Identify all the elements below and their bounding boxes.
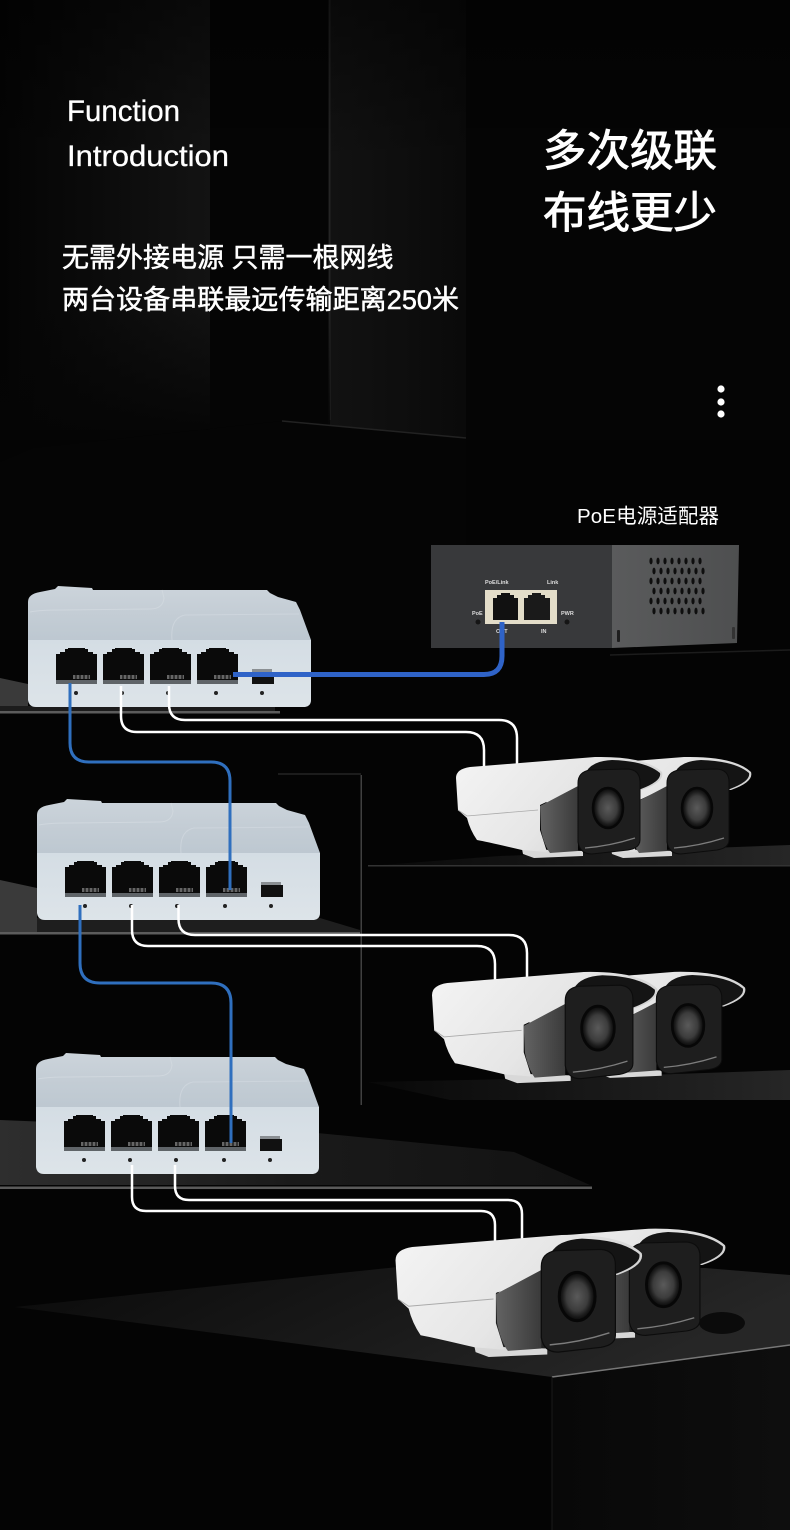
white cables to cameras [121, 686, 527, 1242]
PoE power adapter: PoE [472, 611, 483, 617]
description: 无需外接电源 只需一根网线 [62, 243, 394, 273]
english heading [67, 95, 229, 173]
description: 两台设备串联最远传输距离250米 [62, 285, 459, 315]
blue cable: switch 2 to switch 3 [80, 905, 231, 1143]
switch 1 [28, 586, 311, 707]
english heading: Introduction [67, 140, 229, 173]
blue cable: switch 1 to switch 2 [70, 683, 230, 890]
PoE power adapter: Link [547, 580, 559, 586]
PoE power adapter [431, 545, 739, 648]
english heading: Function [67, 95, 180, 128]
title: 布线更少 [543, 190, 717, 238]
PoE power adapter: IN [541, 629, 547, 635]
adapter label: PoE电源适配器 [577, 505, 719, 528]
title [543, 128, 717, 238]
camera pair 3 [396, 1229, 725, 1357]
switch 3 [36, 1053, 319, 1174]
thick blue cable: adapter to switch 1 [233, 622, 502, 674]
icon: three vertical dots [717, 385, 725, 418]
description [62, 243, 459, 315]
title: 多次级联 [543, 128, 717, 176]
camera pair 1 [456, 757, 751, 858]
PoE power adapter: PWR [561, 611, 574, 617]
switch 2 [37, 799, 320, 920]
PoE power adapter: PoE/Link [485, 580, 509, 586]
camera pair 2 [432, 972, 745, 1083]
PoE power adapter: OUT [496, 629, 508, 635]
